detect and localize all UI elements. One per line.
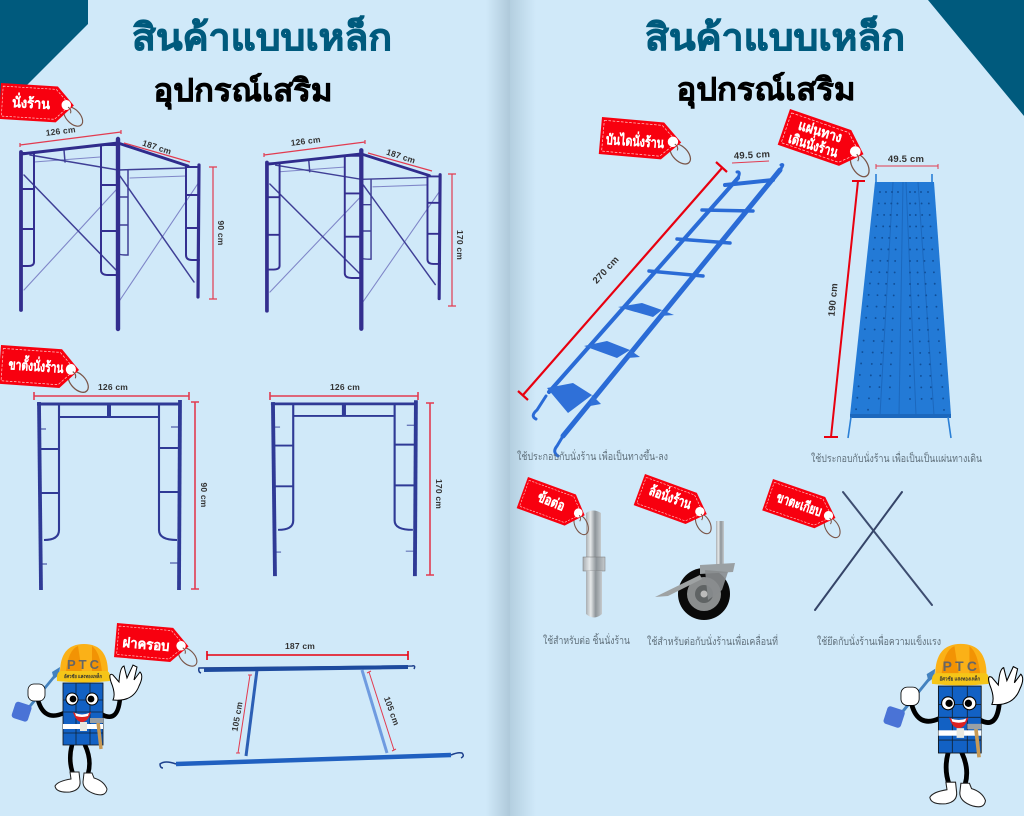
tag: connector: ข้อต่อ xyxy=(535,488,567,514)
frame leg 170 cm: 170 cm xyxy=(434,479,444,509)
tag: walkway plank xyxy=(776,109,884,183)
scaffold 90 cm xyxy=(20,124,226,329)
tag: walkway plank: แผ่นทาง xyxy=(796,117,844,145)
frame leg 170 cm xyxy=(270,382,444,576)
tag: frame leg: ขาตั้งนั่งร้าน xyxy=(8,353,65,376)
tag: caster: ล้อนั่งร้าน xyxy=(647,480,695,512)
tag: ladder: บันไดนั่งร้าน xyxy=(606,129,665,151)
scaffold 170 cm xyxy=(264,134,465,329)
tag: scaffold xyxy=(0,83,88,130)
mascot right: PTC xyxy=(943,658,977,674)
title left: สินค้าแบบเหล็ก xyxy=(132,14,392,58)
ladder with dimensions: 270 cm xyxy=(591,254,622,286)
scaffold 170 cm: 170 cm xyxy=(455,230,465,260)
mascot right: อัศวชัย แสงทองเหล็ก xyxy=(939,675,980,683)
cross bar with dimensions: 187 cm xyxy=(285,641,315,651)
frame leg 90 cm xyxy=(34,382,209,590)
scaffold 90 cm: 90 cm xyxy=(216,220,226,246)
tag: caster xyxy=(632,474,724,539)
scaffold 90 cm: 187 cm xyxy=(141,138,173,157)
subtitle left: อุปกรณ์เสริม xyxy=(154,73,332,110)
mascot left xyxy=(11,644,142,795)
frame leg 90 cm: 126 cm xyxy=(98,382,128,392)
mascot left: อัศวชัย แสงทองเหล็ก xyxy=(64,672,102,680)
caption: plank: ใช้ประกอบกับนั่งร้าน เพื่อเป็นเป็นแผ่นทางเดิน xyxy=(811,451,982,465)
mascot right xyxy=(883,644,1023,807)
ladder with dimensions xyxy=(518,149,783,456)
mascot left: PTC xyxy=(67,657,100,672)
tag: ladder xyxy=(598,117,697,168)
tag: walkway plank: เดินนั่งร้าน xyxy=(787,128,841,160)
tag: cross brace: ขาตะเกียบ xyxy=(775,489,824,519)
cross bar with dimensions xyxy=(160,641,463,768)
caption: caster: ใช้สำหรับต่อกับนั่งร้านเพื่อเคลื่อนที่ xyxy=(647,634,778,648)
ladder with dimensions: 49.5 cm xyxy=(734,149,770,162)
tag: scaffold: นั่งร้าน xyxy=(12,92,51,112)
cross bar with dimensions: 105 cm xyxy=(230,701,245,732)
caption: ladder: ใช้ประกอบกับนั่งร้าน เพื่อเป็นทางขึ้น-ลง xyxy=(517,449,668,463)
tag: cover xyxy=(114,623,203,670)
tag: frame leg xyxy=(0,345,94,397)
walkway plank with dimensions: 190 cm xyxy=(827,283,840,317)
caption: connector: ใช้สำหรับต่อ ชิ้นนั่งร้าน xyxy=(543,633,630,647)
cross brace xyxy=(815,492,932,610)
title right: สินค้าแบบเหล็ก xyxy=(645,14,905,58)
frame leg 170 cm: 126 cm xyxy=(330,382,360,392)
scaffold 170 cm: 126 cm xyxy=(290,134,321,148)
cross bar with dimensions: 105 cm xyxy=(382,695,402,727)
tag: cross brace xyxy=(760,479,853,543)
walkway plank with dimensions xyxy=(824,154,951,438)
center fold shadow xyxy=(486,0,536,816)
connector pin xyxy=(583,510,605,618)
right corner decoration xyxy=(928,0,1024,116)
tag: connector xyxy=(515,477,601,540)
frame leg 90 cm: 90 cm xyxy=(199,482,209,508)
left corner decoration xyxy=(0,0,88,112)
scaffold 90 cm: 126 cm xyxy=(45,124,76,138)
scaffold 170 cm: 187 cm xyxy=(385,147,417,166)
tag: cover: ฝาครอบ xyxy=(122,634,170,654)
caster wheel xyxy=(655,521,735,620)
walkway plank with dimensions: 49.5 cm xyxy=(888,154,924,165)
subtitle right: อุปกรณ์เสริม xyxy=(676,72,856,109)
caption: cross brace: ใช้ยึดกับนั่งร้านเพื่อความแข็งแรง xyxy=(817,634,941,648)
